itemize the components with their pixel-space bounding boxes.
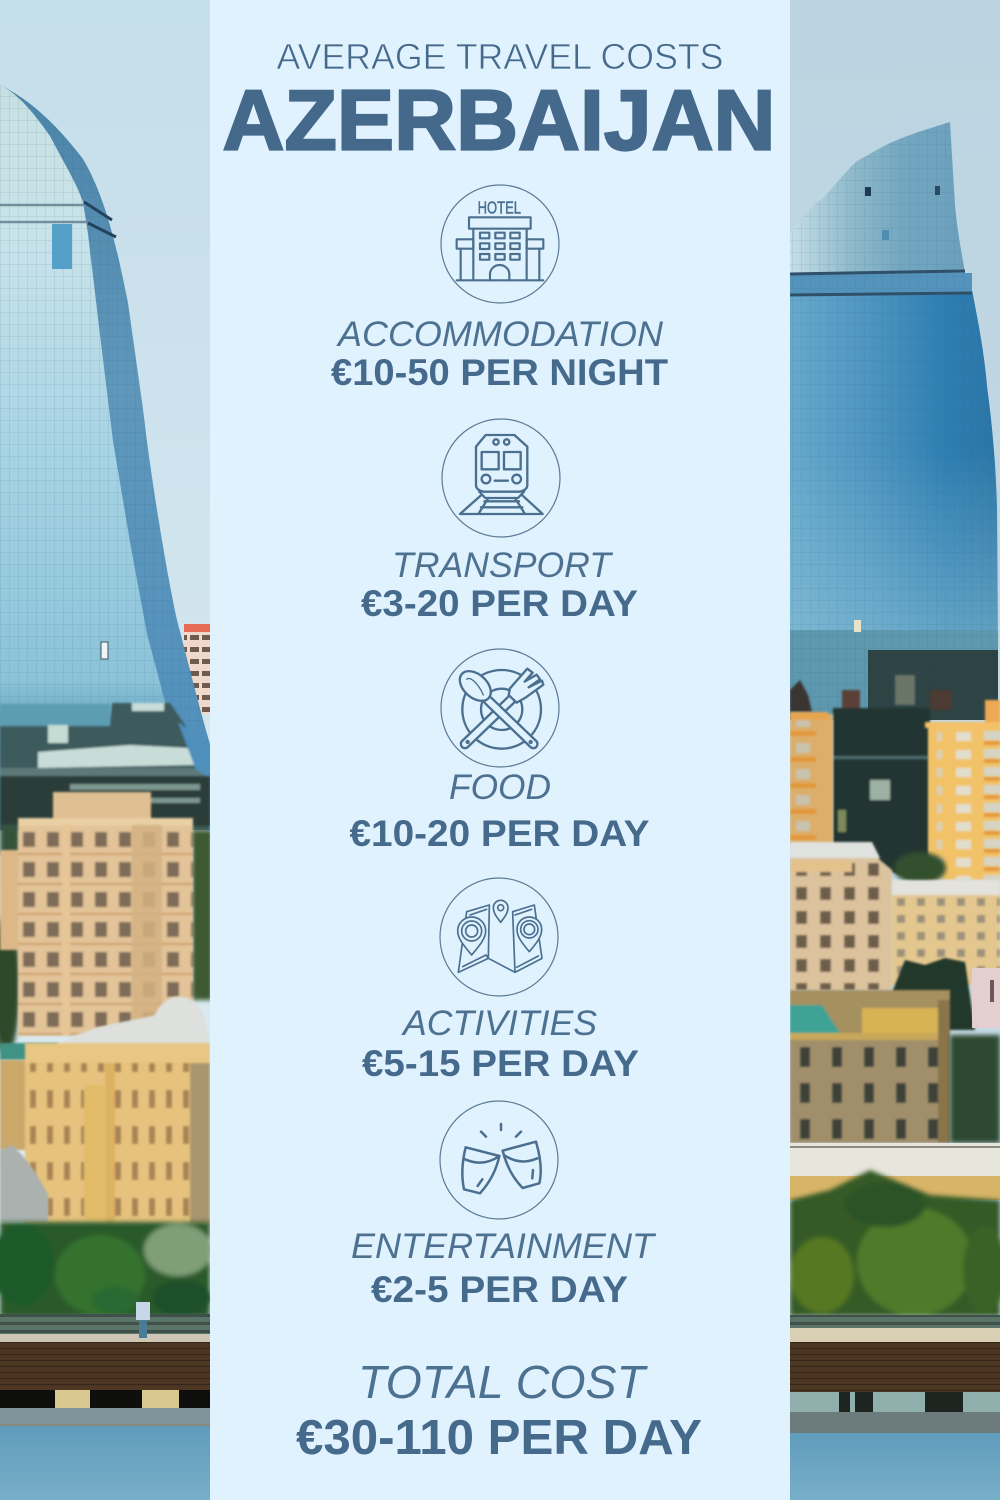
- white domed roof: [0, 997, 210, 1060]
- right tower glass: [790, 122, 998, 720]
- food price: €10-20 PER DAY: [350, 813, 650, 854]
- beige apartment tower: [0, 792, 193, 1036]
- olive building: [790, 990, 950, 1143]
- total cost label: TOTAL COST: [358, 1356, 648, 1408]
- pier supports: [790, 1392, 1000, 1412]
- subtitle: AVERAGE TRAVEL COSTS: [276, 36, 724, 77]
- transport label: TRANSPORT: [392, 546, 614, 585]
- small grey dome: [0, 1145, 48, 1222]
- wooden deck: [0, 1342, 210, 1390]
- wooden deck: [790, 1342, 1000, 1392]
- activities price: €5-15 PER DAY: [362, 1043, 639, 1084]
- trees behind beige tower: [0, 825, 212, 1055]
- central panel: [210, 0, 790, 1500]
- tree behind roofs: [894, 852, 946, 884]
- beige mansard building: [790, 842, 892, 990]
- icon: train: [442, 419, 560, 537]
- icon: hotel: HOTEL: [478, 198, 521, 218]
- icon: clinking glasses: [440, 1101, 558, 1219]
- yellow apartment block: [925, 700, 1000, 880]
- waterfront trees: [790, 1170, 1000, 1316]
- icon: map with pins: [440, 878, 558, 996]
- main heading: AZERBAIJAN: [222, 74, 776, 168]
- white-roof long building: [790, 1143, 1000, 1200]
- activities label: ACTIVITIES: [401, 1004, 597, 1043]
- accommodation label: ACCOMMODATION: [336, 315, 664, 354]
- photo panel: left Flame Tower skyline: [0, 0, 212, 1500]
- icon: hotel: [441, 185, 559, 303]
- food label: FOOD: [449, 768, 551, 807]
- waterfront trees: [0, 1222, 212, 1317]
- entertainment price: €2-5 PER DAY: [371, 1269, 628, 1310]
- entertainment label: ENTERTAINMENT: [351, 1227, 657, 1266]
- total cost price: €30-110 PER DAY: [296, 1411, 702, 1465]
- tree right edge: [950, 1035, 1000, 1143]
- dark cypress trees: [893, 958, 975, 1030]
- tower base reflection: [790, 675, 952, 875]
- accommodation price: €10-50 PER NIGHT: [331, 352, 668, 393]
- reflection band of the tower base: [0, 703, 210, 830]
- water: [0, 1408, 210, 1500]
- sand building with white roof: [892, 880, 1000, 985]
- pier supports: [0, 1390, 210, 1408]
- yellow palace: [0, 1043, 210, 1225]
- railing: [790, 1315, 1000, 1342]
- orange apartment block: [790, 712, 833, 844]
- title: [222, 36, 776, 168]
- pink building: [972, 968, 1000, 1028]
- photo panel: right Flame Tower skyline: [790, 0, 1000, 1500]
- pink distant building: [184, 624, 210, 714]
- icon: food plate and cutlery: [441, 649, 559, 767]
- railing and pedestrian: [0, 1302, 210, 1342]
- transport price: €3-20 PER DAY: [361, 583, 638, 624]
- left tower glass: [0, 85, 210, 830]
- water: [790, 1412, 1000, 1500]
